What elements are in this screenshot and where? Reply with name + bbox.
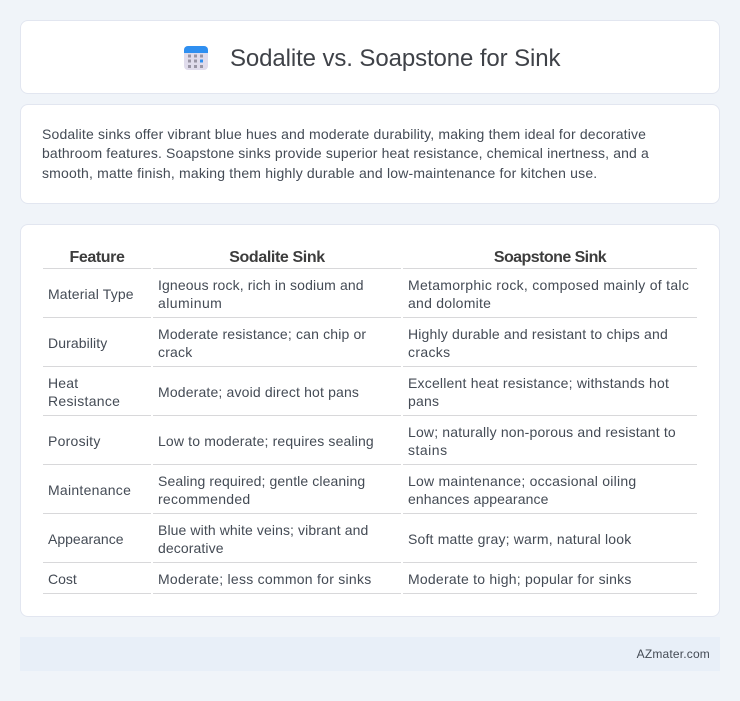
row: Cost bbox=[48, 571, 632, 587]
row: Cost: Moderate to high; popular for sinks bbox=[408, 571, 632, 587]
summary text: smooth, matte finish, making them highly durable and low-maintenance for kitchen use. bbox=[42, 165, 597, 181]
row: Porosity bbox=[48, 424, 676, 458]
row: Material Type: Igneous rock, rich in sodium and bbox=[158, 277, 364, 293]
row: Appearance: Soft matte gray; warm, natural look bbox=[408, 531, 631, 547]
row: Durability: Moderate resistance; can chip or bbox=[158, 326, 366, 342]
row: Porosity: Porosity bbox=[48, 433, 101, 449]
icon: calendar bbox=[184, 46, 208, 70]
row: Durability: cracks bbox=[408, 344, 450, 360]
row: Maintenance: Sealing required; gentle cleaning bbox=[158, 473, 365, 489]
row: Durability: Durability bbox=[48, 335, 107, 351]
table header: Soapstone Sink: Soapstone Sink bbox=[494, 249, 606, 266]
row: Material Type: Material Type bbox=[48, 286, 134, 302]
summary text: bathroom features. Soapstone sinks provide superior heat resistance, chemical inertness, and a bbox=[42, 145, 649, 161]
panel: summary bbox=[20, 104, 720, 204]
row: Porosity: Low to moderate; requires sealing bbox=[158, 433, 374, 449]
table header: Feature: Feature bbox=[70, 249, 124, 266]
row: Cost: Cost bbox=[48, 571, 77, 587]
row: Material Type: Metamorphic rock, composed mainly of talc bbox=[408, 277, 689, 293]
row: Appearance: Appearance bbox=[48, 531, 124, 547]
row: Heat Resistance: Resistance bbox=[48, 393, 120, 409]
panel: comparison table bbox=[20, 224, 720, 617]
row: Porosity: Low; naturally non-porous and resistant to bbox=[408, 424, 676, 440]
title: Sodalite vs. Soapstone for Sink bbox=[230, 45, 560, 72]
row: Maintenance: Maintenance bbox=[48, 482, 131, 498]
row: Heat Resistance: Excellent heat resistance; withstands hot bbox=[408, 375, 669, 391]
row: Appearance bbox=[48, 522, 632, 556]
row: Heat Resistance: Heat bbox=[48, 375, 78, 391]
row: Maintenance: recommended bbox=[158, 491, 250, 507]
row: Porosity: stains bbox=[408, 442, 448, 458]
row: Heat Resistance bbox=[48, 375, 669, 409]
row: Material Type: aluminum bbox=[158, 295, 222, 311]
row: Material Type: and dolomite bbox=[408, 295, 491, 311]
row: Appearance: Blue with white veins; vibrant and bbox=[158, 522, 368, 538]
row: Durability: Highly durable and resistant to chips and bbox=[408, 326, 668, 342]
row: Cost: Moderate; less common for sinks bbox=[158, 571, 371, 587]
row: Material Type bbox=[48, 277, 689, 311]
row: Durability bbox=[48, 326, 668, 360]
row: Appearance: decorative bbox=[158, 540, 224, 556]
table header: Sodalite Sink: Sodalite Sink bbox=[229, 249, 325, 266]
panel: title card bbox=[20, 20, 720, 94]
row: Heat Resistance: Moderate; avoid direct hot pans bbox=[158, 384, 359, 400]
summary text bbox=[42, 126, 649, 181]
row: Heat Resistance: pans bbox=[408, 393, 439, 409]
footer bar bbox=[20, 637, 720, 671]
footer text: AZmater.com bbox=[637, 647, 710, 661]
row: Maintenance: enhances appearance bbox=[408, 491, 548, 507]
row: Maintenance bbox=[48, 473, 636, 507]
row: Durability: crack bbox=[158, 344, 192, 360]
summary text: Sodalite sinks offer vibrant blue hues and moderate durability, making them ideal for decorative bbox=[42, 126, 646, 142]
row: Maintenance: Low maintenance; occasional oiling bbox=[408, 473, 636, 489]
